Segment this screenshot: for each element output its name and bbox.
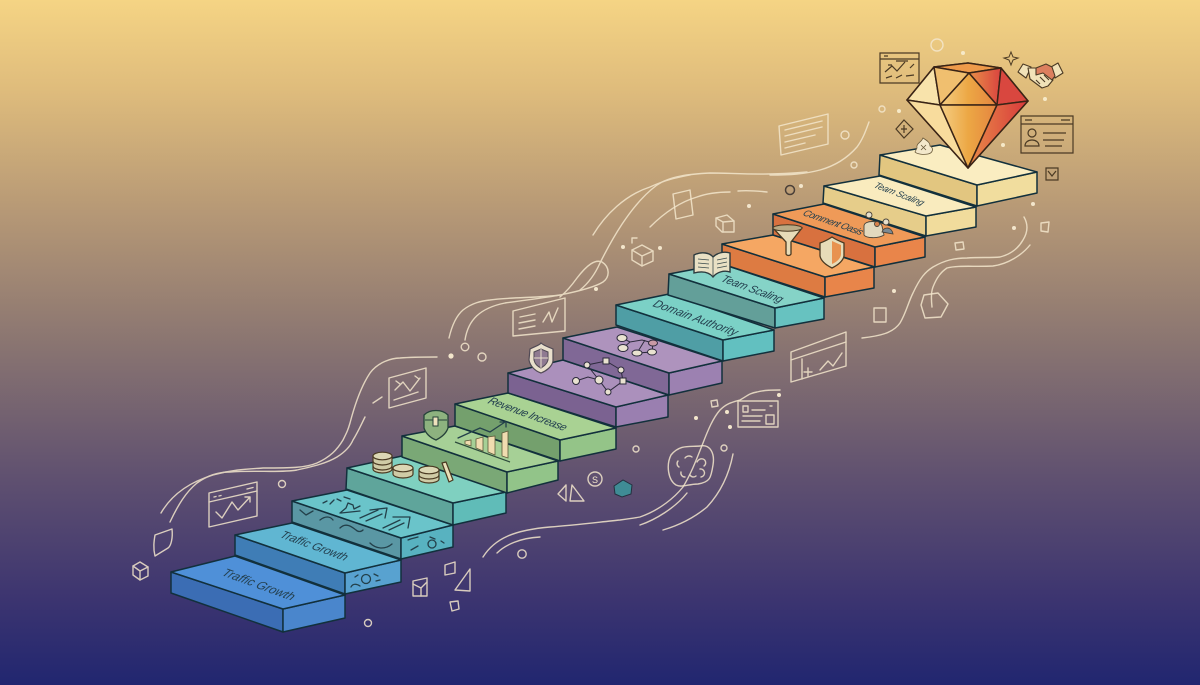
icon: chart board	[389, 368, 426, 408]
step 14	[879, 145, 1037, 206]
icon: sparkle	[1004, 52, 1018, 65]
icon: cube outline	[716, 215, 734, 232]
icon: user profile window	[1021, 116, 1073, 153]
icon: id card small	[738, 401, 778, 427]
icon: green shield	[424, 410, 448, 440]
step 9	[616, 294, 774, 361]
icon: rounded badge	[921, 293, 948, 318]
step 2	[235, 523, 401, 594]
step 6	[455, 393, 616, 461]
icon: cube lower left	[133, 562, 148, 580]
icon: coin stacks	[373, 452, 453, 483]
icon: small figure on top step	[915, 138, 932, 154]
icon: handshake	[1018, 63, 1063, 88]
icon: bar chart with trend arrow	[455, 422, 510, 462]
icon: small squares	[711, 222, 1049, 407]
icon: envelope square	[1046, 168, 1058, 180]
icon: cube left of steps	[632, 238, 653, 266]
step 3	[292, 490, 453, 559]
step 11	[722, 235, 874, 297]
icon: chart window lower left	[209, 482, 257, 527]
icon: sketch on side	[351, 574, 380, 587]
step 12	[773, 204, 925, 267]
icon: silver shield	[529, 343, 553, 373]
label: Comment Oasis: Comment Oasis	[800, 208, 866, 238]
icon: arrows and waves on step 3	[300, 497, 444, 550]
step 5	[402, 426, 558, 493]
label: Team Scaling: Team Scaling	[718, 274, 786, 306]
step 8	[563, 327, 722, 395]
icon: document note upper	[779, 114, 828, 155]
icon: network graph on step 8	[617, 334, 658, 356]
label: Team Scaling: Team Scaling	[872, 181, 928, 207]
icon: orange shield	[820, 237, 844, 268]
flowing line decorations	[161, 122, 1030, 557]
step 7	[508, 360, 668, 427]
step 10	[668, 264, 824, 328]
label: Traffic Growth: Traffic Growth	[219, 566, 299, 603]
step 1	[171, 556, 345, 632]
label: Domain Authority: Domain Authority	[650, 298, 742, 339]
icon: chart window top	[880, 53, 919, 83]
icon: network graph on step 7	[572, 358, 626, 395]
step 13	[823, 176, 976, 236]
icon: open book	[694, 252, 730, 277]
icon: team people	[864, 212, 893, 238]
icon: rectangle outline	[673, 190, 693, 219]
icon: small diamond badge	[896, 120, 913, 138]
label: Traffic Growth: Traffic Growth	[277, 529, 351, 564]
icon: small shapes lower centre	[413, 562, 470, 611]
icon: funnel	[773, 225, 802, 256]
icon: diamond	[907, 63, 1028, 168]
small rings and dots	[278, 39, 1047, 626]
icon: brain in blob	[668, 446, 713, 486]
step 4	[346, 456, 506, 525]
icon: note shape	[154, 529, 172, 556]
icon: dashboard window	[791, 332, 846, 382]
label: Revenue Increase: Revenue Increase	[485, 396, 570, 433]
icon: document with signature	[513, 298, 565, 336]
icon: coin, scale and gem	[558, 472, 632, 501]
icon: coin, scale and gem: S	[592, 475, 598, 485]
